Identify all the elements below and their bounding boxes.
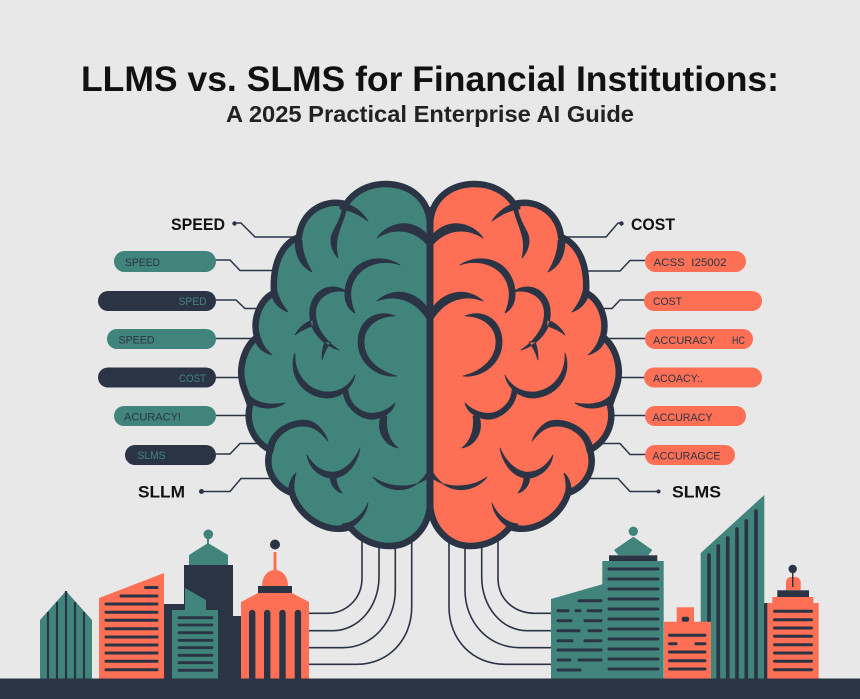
- building: teal office with domed top: [551, 527, 664, 679]
- building: tall teal slanted: [701, 495, 764, 679]
- right pill: ACCURAGCE: ACCURAGCE: [652, 450, 720, 462]
- right pill: COST: [644, 291, 762, 311]
- brain: right hemisphere: [430, 184, 619, 546]
- building: small coral: [664, 607, 711, 679]
- wires: brain to left city: [309, 540, 412, 664]
- left pill: SPEED: [114, 251, 216, 272]
- brain: left hemisphere: [241, 184, 430, 546]
- right pill: ACCURAGCE: [645, 445, 735, 465]
- label: SLMS: SLMS: [672, 482, 721, 502]
- right pill: ACSS I25002: [645, 251, 746, 272]
- subtitle: A 2025 Practical Enterprise AI Guide: [226, 101, 634, 127]
- building: coral domed: [241, 540, 309, 679]
- left pill: SPED: SPED: [178, 296, 207, 308]
- label: SLLM: SLLM: [138, 482, 185, 502]
- brain: centre divider: [426, 207, 434, 518]
- label: COST: COST: [631, 215, 676, 234]
- right pill: ACCURACY: ACCURACY: [652, 412, 713, 424]
- building: dark tower with teal roof: [164, 530, 242, 679]
- right pill: ACCURACY HC: HC: [732, 335, 745, 347]
- left pill: ACURACY!: [114, 406, 216, 426]
- left pill: SPEED: SPEED: [125, 257, 160, 269]
- right city: [551, 495, 819, 679]
- building: right coral with antenna: [764, 565, 819, 679]
- left city: [40, 530, 309, 679]
- right pill: COST: COST: [653, 296, 682, 308]
- left pill: COST: COST: [179, 373, 206, 385]
- left pill: SLMS: SLMS: [138, 450, 166, 462]
- building: teal front: [172, 588, 218, 679]
- left leader lines: [199, 221, 300, 494]
- left pill: SPED: [98, 291, 216, 311]
- label: SPEED: SPEED: [171, 215, 225, 234]
- left pill: SPEED: [107, 329, 216, 349]
- title: LLMS vs. SLMS for Financial Institutions:: [81, 60, 779, 99]
- building: coral slanted: [99, 573, 164, 679]
- left pill: COST: [98, 368, 216, 388]
- right pill: ACSS I25002: ACSS I25002: [654, 257, 726, 269]
- left pill: ACURACY!: ACURACY!: [124, 412, 181, 424]
- left pill: SPEED: SPEED: [118, 334, 155, 346]
- right pill: ACCURACY HC: [645, 329, 753, 349]
- right leader lines: [560, 221, 660, 494]
- right pill: ACOACY:.: [644, 368, 762, 388]
- right pill: ACCURACY HC: ACCURACY: [653, 335, 716, 347]
- right pill: ACOACY:.: ACOACY:.: [653, 373, 703, 385]
- left pill: SLMS: [125, 445, 216, 465]
- ground strip: [0, 678, 860, 699]
- wires: brain to right city: [449, 540, 551, 664]
- right pill: ACCURACY: [645, 406, 746, 426]
- building: teal gabled: [40, 591, 92, 679]
